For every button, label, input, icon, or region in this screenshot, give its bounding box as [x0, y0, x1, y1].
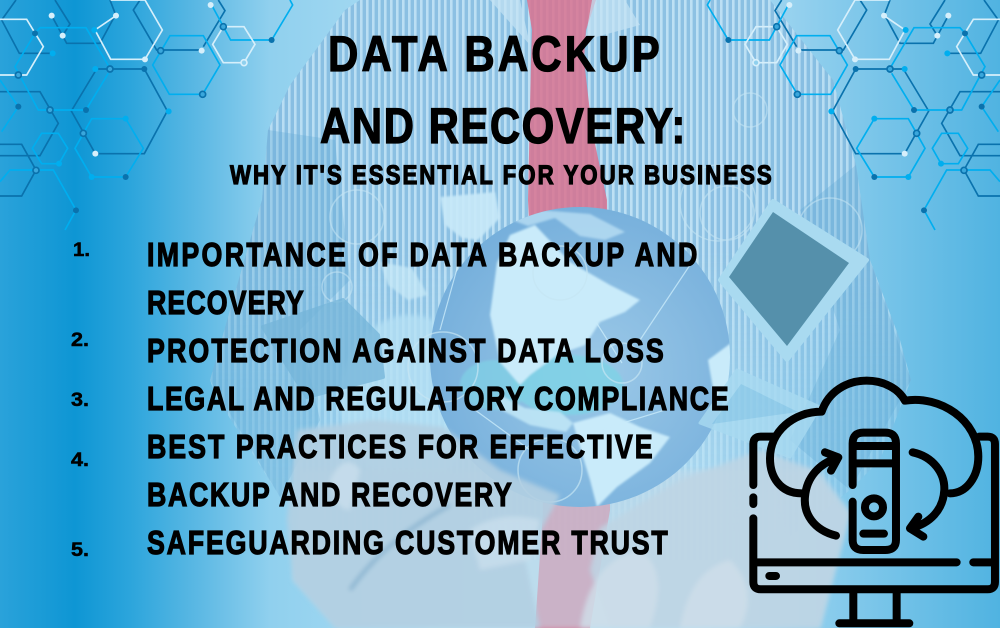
collar: [490, 0, 640, 45]
envelope: [700, 370, 820, 457]
smartphone: [263, 300, 383, 397]
left hand finger highlights: [330, 462, 540, 570]
left hand: [287, 420, 560, 628]
item 3: LEGAL AND REGULATORY COMPLIANCE: [147, 381, 729, 418]
data icon rings: [322, 93, 862, 302]
tablet device: [720, 201, 867, 360]
icon: cloud backup on monitor: [753, 381, 995, 623]
arm shading: [210, 130, 911, 497]
hexagon network: left: [0, 0, 293, 230]
arctic islands: [512, 210, 625, 240]
north america: [490, 225, 640, 385]
item 5: SAFEGUARDING CUSTOMER TRUST: [147, 525, 668, 562]
pale chest glow: [340, 315, 480, 485]
right hand: [580, 450, 850, 628]
sync arrow: left: [805, 452, 838, 536]
item 2: PROTECTION AGAINST DATA LOSS: [147, 333, 664, 370]
central american strip: [498, 395, 573, 432]
item 1: IMPORTANCE OF DATA BACKUP AND: [147, 237, 697, 274]
monitor frame: [753, 437, 995, 589]
title: [320, 26, 685, 154]
south america: [573, 413, 670, 507]
subtitle: WHY IT'S ESSENTIAL FOR YOUR BUSINESS: [230, 161, 772, 190]
hexagon network: right: [707, 0, 1000, 230]
title: AND RECOVERY:: [320, 98, 685, 154]
item 4: BEST PRACTICES FOR EFFECTIVE: [147, 429, 653, 466]
item 1: 1.: [73, 240, 90, 261]
server disc: [865, 498, 883, 516]
title: DATA BACKUP: [328, 26, 660, 82]
necktie: [527, 0, 610, 628]
server tower: [853, 433, 896, 550]
globe data rings: [408, 246, 642, 502]
right hand finger highlights: [580, 550, 748, 628]
item 2: 2.: [71, 330, 89, 351]
globe: [408, 207, 735, 507]
item 5: 5.: [71, 540, 89, 561]
item 4: 4.: [71, 450, 89, 471]
monitor stand: [839, 590, 909, 623]
item 4: BACKUP AND RECOVERY: [147, 477, 512, 514]
shirt torso: [210, 0, 910, 498]
bottom pale haze behind hands: [293, 470, 850, 628]
caribbean teal water: [513, 355, 623, 415]
world map scraps around globe: [380, 192, 500, 300]
item 1: [73, 237, 697, 322]
globe connector lines: [440, 265, 690, 450]
africa edge: [707, 343, 730, 396]
cloud: [770, 381, 978, 493]
item 3: 3.: [71, 390, 89, 411]
sync arrow: right: [910, 452, 944, 537]
item 4: [71, 429, 653, 514]
photo: businessman holding globe: [210, 0, 911, 628]
numbered list: [71, 237, 729, 562]
item 1: RECOVERY: [147, 285, 304, 322]
left hand crease: [350, 505, 450, 590]
